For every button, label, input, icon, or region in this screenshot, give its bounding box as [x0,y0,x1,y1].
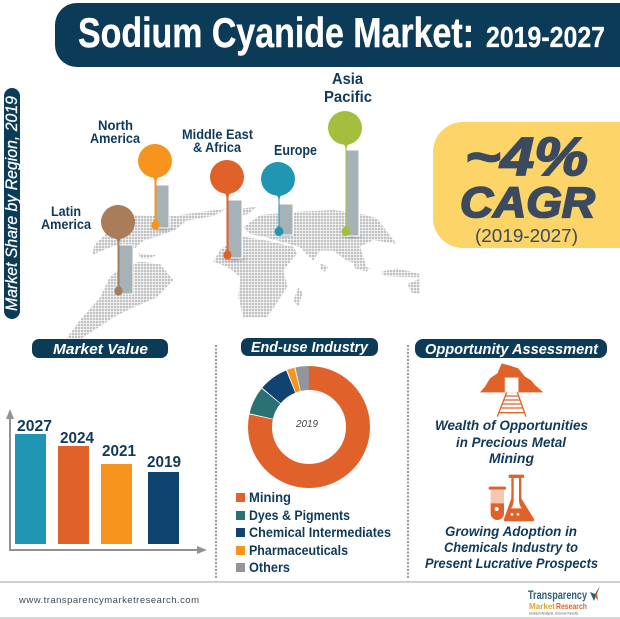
legend: Dyes and Pigments: Dyes & Pigments [249,508,350,523]
pin: Europe [261,162,295,236]
bar labels: 2021 [102,443,136,460]
logo: Transparency Market Research [528,586,600,616]
label: North America [90,117,140,146]
logo: Transparency Market Research: Research [556,601,587,611]
logo: Transparency Market Research: Unleash Analysis. Uncover Results. [529,612,579,616]
label: Latin America: America [41,216,91,232]
logo: Transparency Market Research: Transparency [528,588,587,602]
text: precious metal mining [435,417,588,466]
label: Asia Pacific: Asia [332,71,363,88]
CAGR word: CAGR [460,179,595,227]
text: precious metal mining: Mining [489,450,534,466]
bar labels [17,418,181,471]
bar labels: 2024 [60,430,94,447]
label: Latin America [41,203,91,232]
legend: Chemical Intermediates: Chemical Intermediates [249,525,391,540]
text: chemicals industry adoption: Growing Adoption in [445,523,577,539]
legend: Others: Others [249,560,290,575]
bar chart: market value [6,409,207,554]
label: Middle East and Africa: Middle East [182,126,253,142]
bar labels: 2019 [147,454,181,471]
heading: End-use Industry: End-use Industry [251,339,369,356]
label: North America: North [98,117,133,133]
pin: Middle East and Africa [210,160,244,260]
legend: Mining: Mining [249,490,291,505]
title banner [55,3,620,67]
text: chemicals industry adoption [425,523,598,571]
text: precious metal mining: Wealth of Opportunities [435,417,588,433]
label: Middle East and Africa: & Africa [193,139,241,155]
bar 2027 [15,434,46,544]
logo: Transparency Market Research: Market [529,601,555,611]
label: Europe: Europe [274,143,317,159]
bar 2021 [101,464,132,544]
donut centre label: 2019 [295,419,318,430]
heading: Opportunity Assessment: Opportunity Assessment [425,341,599,358]
label: Asia Pacific [324,71,372,106]
bar 2024 [58,446,89,544]
pin: Asia Pacific [328,111,362,236]
CAGR period: (2019-2027) [475,226,578,246]
label: Middle East and Africa [182,126,253,155]
heading: Market Value [32,339,168,358]
legend: end-use industry [236,490,391,575]
donut chart: end-use industry [260,378,358,476]
callout: CAGR [433,122,620,248]
icon: laboratory flasks [489,475,534,521]
footer website: www.transparencymarketresearch.com [18,595,199,606]
heading: Market Value: Market Value [53,341,148,358]
bar labels: 2027 [17,418,52,435]
pin: Latin America [101,205,135,296]
chart axes [6,409,207,554]
CAGR value: ~4% [465,127,588,187]
pin: North America [138,144,172,230]
text: chemicals industry adoption: Chemicals Industry to [444,539,578,555]
label: North America: America [90,130,140,146]
label: Asia Pacific: Pacific [324,89,372,106]
label: Latin America: Latin [51,203,81,219]
text: precious metal mining: in Precious Metal [456,434,567,450]
dotted world map [67,207,420,338]
legend: Pharmaceuticals: Pharmaceuticals [249,543,348,558]
bar 2019 [148,472,179,544]
title text: Sodium Cyanide Market: [78,9,474,56]
text: chemicals industry adoption: Present Lucrative Prospects [425,555,598,571]
icon: mine [480,363,543,417]
vertical heading: market share by region: Market Share by Region, 2019 [3,96,21,311]
